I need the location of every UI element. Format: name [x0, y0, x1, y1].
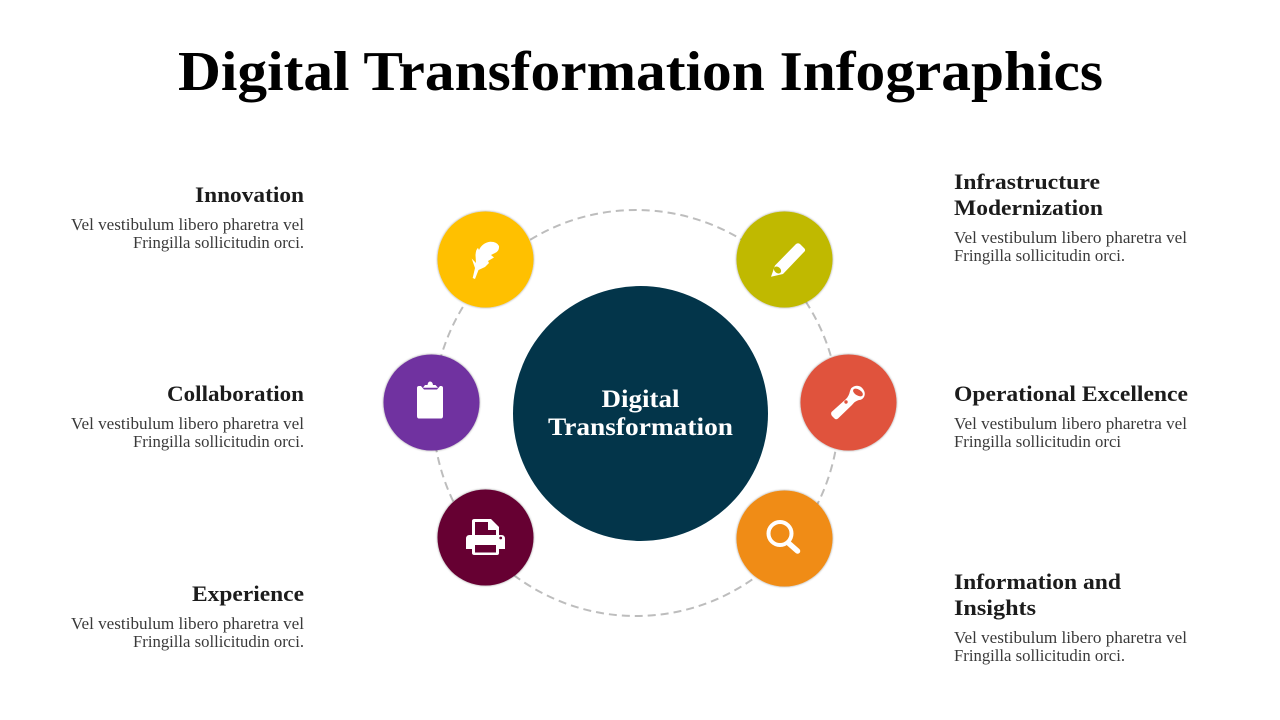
text: infrastructure modernization: Infrastructure [954, 169, 1100, 194]
node: innovation feather [438, 212, 534, 308]
text: innovation: Vel vestibulum libero pharetra vel [71, 215, 304, 234]
text: experience: Experience [192, 581, 304, 606]
text: innovation: Fringilla sollicitudin orci. [133, 233, 304, 252]
icon: printer [466, 519, 505, 555]
text: collaboration: Vel vestibulum libero pharetra vel [71, 414, 304, 433]
text: information and insights: Fringilla sollicitudin orci. [954, 646, 1125, 665]
icon: clipboard [417, 382, 443, 418]
text: experience: Vel vestibulum libero pharetra vel [71, 614, 304, 633]
text: information and insights [954, 569, 1187, 665]
text: collaboration: Fringilla sollicitudin orci. [133, 432, 304, 451]
title: Digital Transformation Infographics [178, 41, 1103, 103]
text: collaboration: Collaboration [167, 381, 304, 406]
text: infrastructure modernization [954, 169, 1187, 265]
text: innovation [71, 182, 304, 252]
center circle: Transformation [548, 412, 733, 441]
text: operational excellence: Operational Excellence [954, 381, 1188, 406]
text: experience: Fringilla sollicitudin orci. [133, 632, 304, 651]
text: infrastructure modernization: Vel vestibulum libero pharetra vel [954, 228, 1187, 247]
center circle [513, 286, 768, 541]
text: infrastructure modernization: Modernization [954, 195, 1104, 220]
text: innovation: Innovation [195, 182, 304, 207]
text: operational excellence [954, 381, 1188, 451]
node: infrastructure pencil [736, 212, 832, 308]
text: information and insights: Vel vestibulum libero pharetra vel [954, 628, 1187, 647]
dashed ring [433, 210, 839, 616]
node: information magnifier [736, 490, 832, 586]
icon: magnifier [768, 522, 798, 551]
node: experience printer [438, 490, 534, 586]
node: operational flashlight [800, 354, 896, 450]
icon: feather [472, 242, 499, 279]
text: experience [71, 581, 304, 651]
text: operational excellence: Vel vestibulum libero pharetra vel [954, 414, 1187, 433]
icon: pencil [771, 243, 805, 277]
text: infrastructure modernization: Fringilla sollicitudin orci. [954, 246, 1125, 265]
text: collaboration [71, 381, 304, 451]
node: collaboration clipboard [384, 354, 480, 450]
center circle: Digital [602, 384, 680, 413]
text: operational excellence: Fringilla sollicitudin orci [954, 432, 1121, 451]
icon: flashlight [831, 386, 865, 419]
text: information and insights: Insights [954, 595, 1036, 620]
text: information and insights: Information and [954, 569, 1122, 594]
